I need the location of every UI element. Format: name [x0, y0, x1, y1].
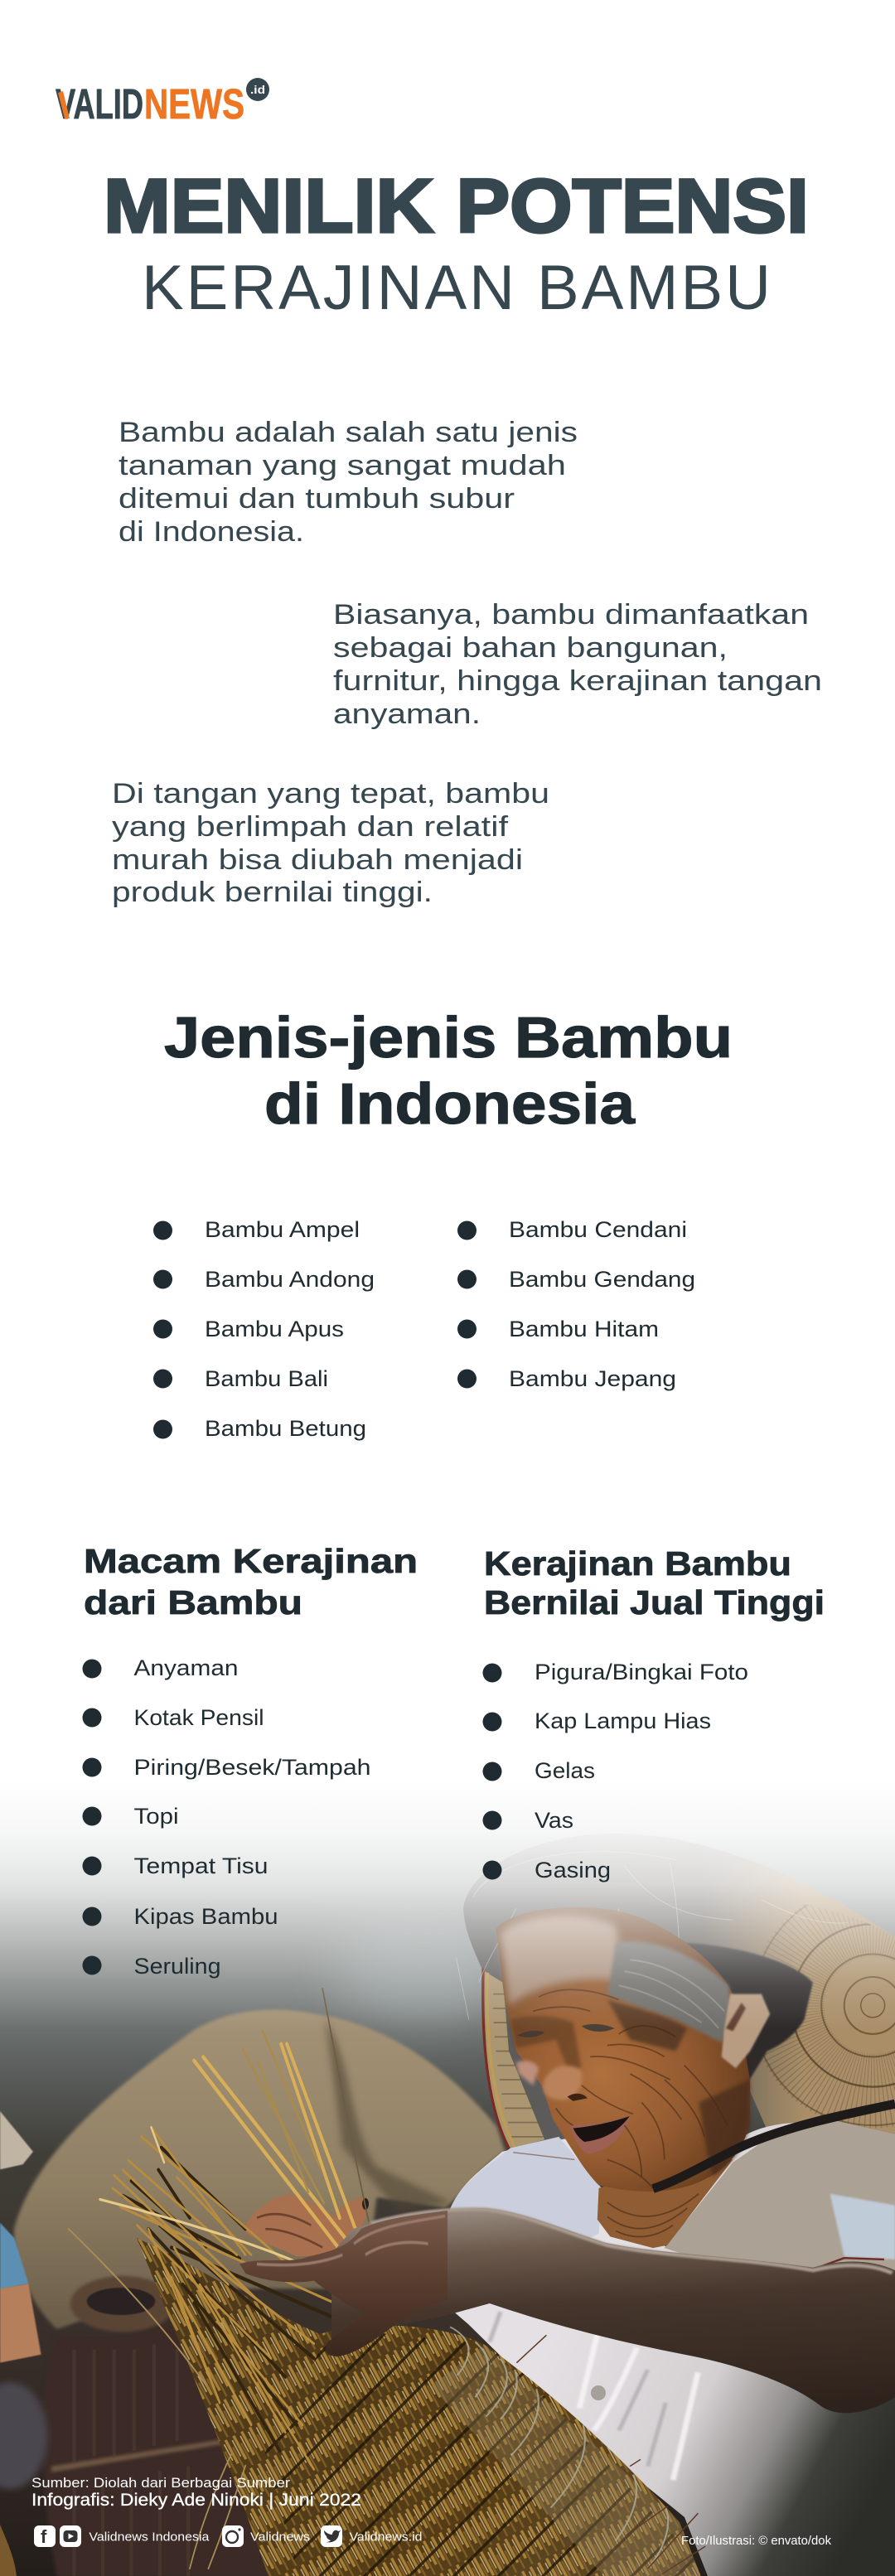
- hat underside straw ribs: [493, 1994, 543, 2137]
- heading: types of bamboo: Jenis-jenis Bambu: [164, 1005, 733, 1070]
- subtitle: KERAJINAN BAMBU: [142, 253, 772, 323]
- hat fibres: [456, 1852, 847, 2020]
- hand with fingers and thumb: [239, 2211, 448, 2356]
- social label: Validnews Indonesia: Validnews Indonesia: [89, 2530, 210, 2544]
- logo V accent: [58, 91, 70, 118]
- photo backdrop: [0, 1781, 895, 2576]
- shoulder seam: [513, 2153, 574, 2159]
- thin loose straws: [69, 2229, 245, 2569]
- basket wire wraps: [450, 2327, 668, 2569]
- list: kinds of crafts: [83, 1655, 371, 1979]
- shirt button: [591, 2385, 606, 2400]
- social label: Validnews: Validnews: [250, 2530, 310, 2544]
- icon: youtube: [60, 2525, 81, 2547]
- clay pot body: [42, 2319, 274, 2576]
- icon: instagram: [222, 2525, 244, 2547]
- icon: facebook: [34, 2525, 56, 2547]
- pale strips: [100, 2127, 306, 2266]
- list: kinds of crafts: Kipas Bambu: [134, 1904, 278, 1929]
- list: kinds of crafts: Piring/Besek/Tampah: [134, 1755, 371, 1780]
- temple shadow: [607, 2000, 687, 2052]
- basket right side tone: [431, 2345, 701, 2576]
- heading: high-value crafts: Bernilai Jual Tinggi: [484, 1583, 825, 1621]
- logo .id badge: [246, 78, 269, 101]
- source credit: Sumber: Diolah dari Berbagai Sumber: [31, 2475, 290, 2491]
- fingernail: [362, 2198, 369, 2210]
- intro paragraph 3: murah bisa diubah menjadi: [112, 844, 523, 876]
- golden strips: [113, 2127, 342, 2469]
- hat rim inner band: [487, 1973, 515, 2147]
- list: high-value crafts: Kap Lampu Hias: [535, 1708, 711, 1733]
- intro paragraph 1: di Indonesia.: [119, 516, 304, 548]
- hat underside straw: [485, 1971, 544, 2149]
- clay pot opening: [87, 2288, 155, 2315]
- nose highlight: [544, 2066, 582, 2100]
- heading: types of bamboo: di Indonesia: [264, 1071, 636, 1136]
- infographic credit: Infografis: Dieky Ade Ninoki | Juni 2022: [31, 2491, 361, 2510]
- list: high-value crafts: [482, 1660, 748, 1882]
- hair strands: [619, 1960, 724, 2028]
- upper strips: [194, 2044, 357, 2253]
- heading: kinds of crafts: dari Bambu: [84, 1583, 302, 1621]
- upper thin strips: [243, 2031, 324, 2203]
- woven bamboo basket: [137, 2238, 713, 2576]
- intro paragraph 1: ditemui dan tumbuh subur: [119, 483, 515, 515]
- photo: elderly woman weaving a bamboo basket: [0, 1781, 895, 2576]
- intro paragraph 3: yang berlimpah dan relatif: [112, 811, 509, 843]
- shirt body: [451, 2123, 895, 2576]
- list: types of bamboo, column 1: Bambu Ampel: [205, 1217, 360, 1242]
- other person: arm: [0, 2284, 41, 2363]
- icon: twitter: [321, 2525, 342, 2547]
- basket weave rows: [265, 2328, 713, 2576]
- intro paragraph 1: [119, 417, 578, 548]
- heading: high-value crafts: [484, 1544, 825, 1621]
- list: high-value crafts: Gelas: [535, 1758, 595, 1783]
- inner ear: [726, 2003, 746, 2031]
- social label: Validnews.id: Validnews.id: [350, 2530, 423, 2544]
- forearm and hand: [239, 2208, 895, 2413]
- icon: facebook: f: [41, 2526, 47, 2547]
- burlap fold shadow: [326, 2020, 451, 2212]
- heading: types of bamboo: [164, 1005, 733, 1136]
- nostril: [568, 2094, 588, 2101]
- list: kinds of crafts: Tempat Tisu: [134, 1853, 268, 1878]
- list: high-value crafts: Gasing: [535, 1858, 611, 1882]
- heading: high-value crafts: Kerajinan Bambu: [484, 1544, 791, 1583]
- heading: kinds of crafts: Macam Kerajinan: [84, 1542, 418, 1580]
- list: types of bamboo, column 2: [457, 1217, 695, 1391]
- list: kinds of crafts: Seruling: [134, 1954, 220, 1979]
- list: kinds of crafts: Kotak Pensil: [134, 1705, 264, 1730]
- shirt: [448, 2117, 895, 2576]
- intro paragraph 3: produk bernilai tinggi.: [112, 877, 433, 908]
- face wrinkles: [533, 1989, 728, 2188]
- head shape: [496, 1907, 750, 2192]
- bamboo strips at the basket neck: [69, 1989, 369, 2569]
- lips: [570, 2115, 630, 2154]
- heading: kinds of crafts: [84, 1542, 418, 1621]
- logo word VALID: VALID: [56, 80, 143, 128]
- small basket corner at the lower left: [0, 2525, 17, 2576]
- cheek highlight: [516, 2061, 539, 2085]
- lit top edge of the forearm: [371, 2209, 893, 2273]
- left shoulder of shirt: [448, 2137, 602, 2251]
- intro paragraph 3: Di tangan yang tepat, bambu: [112, 778, 549, 810]
- intro paragraph 3: [112, 778, 549, 908]
- protruding strand tips: [516, 2335, 705, 2574]
- intro paragraph 1: Bambu adalah salah satu jenis: [119, 417, 578, 448]
- sleeve hem: [813, 2258, 884, 2269]
- conical straw hat: [463, 1834, 895, 2151]
- logo word NEWS: NEWS: [144, 80, 244, 128]
- list: types of bamboo, column 2: Bambu Jepang: [509, 1366, 676, 1391]
- hat rim: [483, 1969, 510, 2149]
- logo: Validnews.id: [56, 78, 269, 128]
- list: types of bamboo, column 1: Bambu Apus: [205, 1317, 344, 1341]
- dark strips: [123, 2148, 342, 2451]
- woman's hat and head: [456, 1834, 895, 2151]
- intro paragraph 2: sebagai bahan bangunan,: [333, 632, 728, 664]
- hat chin strap: [653, 2104, 895, 2189]
- list: types of bamboo, column 1: Bambu Betung: [205, 1416, 366, 1441]
- neck: [597, 2159, 733, 2248]
- basket body: [137, 2238, 701, 2576]
- ear: [722, 1994, 770, 2068]
- blurred light behind the figure: [331, 1922, 514, 2022]
- cloth drape: [665, 2117, 895, 2270]
- burlap-coloured fish trap: [14, 2009, 505, 2329]
- knuckle highlights: [257, 2216, 445, 2265]
- neck creases: [607, 2194, 699, 2237]
- list: kinds of crafts: Topi: [134, 1804, 179, 1829]
- blurred background elements: [0, 2009, 505, 2576]
- grey hair: [607, 1941, 733, 2042]
- woman's face: [496, 1907, 895, 2248]
- list: high-value crafts: Vas: [535, 1808, 573, 1833]
- eye: right: [582, 2024, 614, 2032]
- logo .id text: .id: [250, 83, 265, 96]
- intro paragraph 2: anyaman.: [333, 698, 481, 730]
- basket strands: [137, 2238, 701, 2576]
- pale forehead: [501, 1916, 625, 2005]
- open mouth: [573, 2116, 630, 2142]
- long thin upper straw: [322, 1989, 369, 2221]
- forearm: [331, 2208, 895, 2413]
- finger creases: [257, 2214, 322, 2247]
- list: kinds of crafts: Anyaman: [134, 1655, 239, 1680]
- list: high-value crafts: Pigura/Bingkai Foto: [535, 1660, 748, 1684]
- list: types of bamboo, column 1: [153, 1217, 375, 1441]
- eye: left: [517, 2031, 544, 2037]
- white fade over the top of the photo: [0, 1781, 895, 2030]
- shirt pleats: [490, 2312, 698, 2480]
- list: types of bamboo, column 2: Bambu Gendang: [509, 1267, 695, 1292]
- pot vertical ribbing: [75, 2345, 188, 2576]
- list: types of bamboo, column 1: Bambu Andong: [205, 1267, 375, 1292]
- jaw shadow: [699, 2080, 750, 2177]
- photo credit: Foto/Ilustrasi: © envato/dok: [681, 2535, 832, 2548]
- other person: blue sleeve: [0, 2223, 28, 2289]
- dark hair bun: [676, 1943, 813, 2088]
- list: types of bamboo, column 2: Bambu Cendani: [509, 1217, 687, 1242]
- clay pot rim: [70, 2276, 175, 2332]
- other person: hat: [0, 2111, 33, 2169]
- other person: clothing: [0, 2382, 47, 2489]
- list: types of bamboo, column 2: Bambu Hitam: [509, 1317, 659, 1341]
- intro paragraph 2: Biasanya, bambu dimanfaatkan: [333, 599, 809, 631]
- pot band: [51, 2438, 228, 2472]
- intro paragraph 2: [333, 599, 822, 730]
- sleeve highlight: [830, 2194, 895, 2259]
- title: MENILIK POTENSI: [104, 164, 809, 249]
- brow shadow: [510, 2016, 582, 2068]
- intro paragraph 2: furnitur, hingga kerajinan tangan: [333, 665, 822, 697]
- hat rings: [762, 1904, 895, 2128]
- intro paragraph 1: tanaman yang sangat mudah: [119, 450, 566, 481]
- upper hand holding strips: [245, 2194, 369, 2257]
- list: types of bamboo, column 1: Bambu Bali: [205, 1366, 328, 1391]
